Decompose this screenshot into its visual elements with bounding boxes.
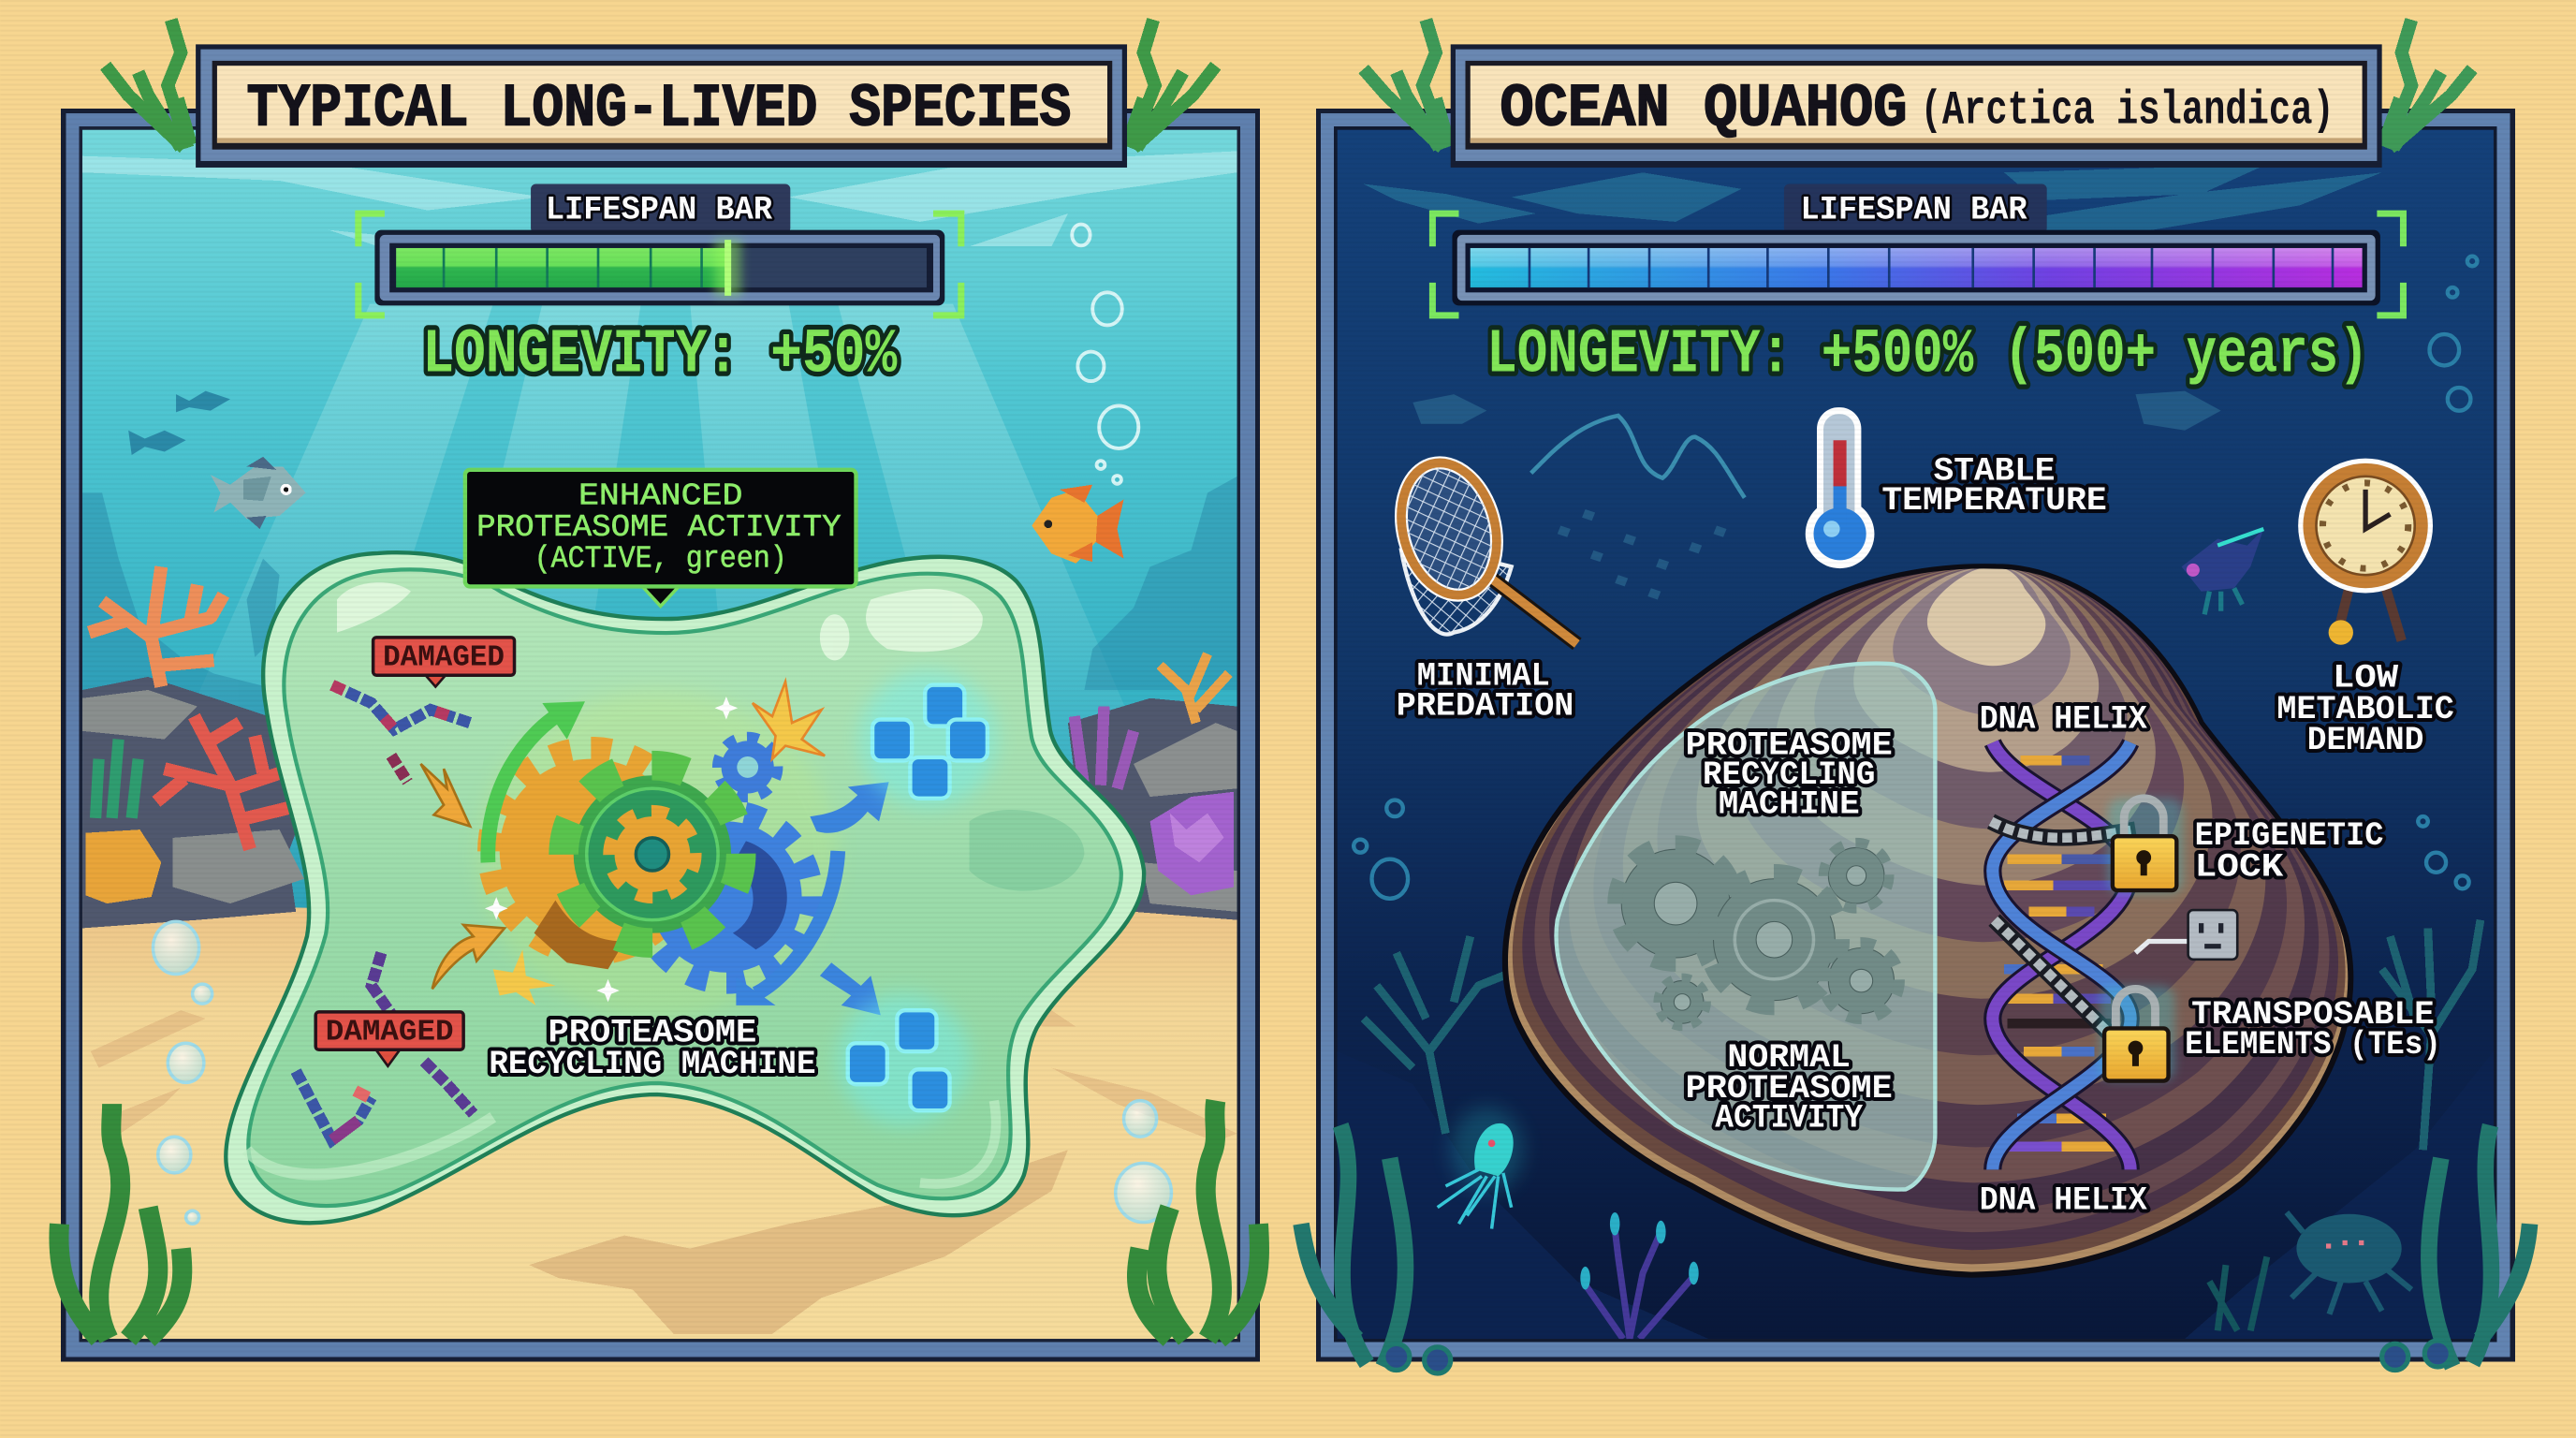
scene: deep sea bbox=[1338, 130, 2494, 1339]
arrow: blue curve bbox=[755, 851, 838, 994]
label: transposable elements bbox=[2185, 996, 2441, 1064]
damaged label top bbox=[373, 638, 515, 686]
fish silhouettes bbox=[128, 391, 230, 455]
seaweed: top right bbox=[1127, 20, 1216, 148]
label: normal proteasome activity: ACTIVITY bbox=[1715, 1100, 1863, 1137]
label: proteasome recycling machine bbox=[1686, 726, 1893, 824]
arrow: blue to output bottom bbox=[820, 962, 881, 1015]
panel frame bbox=[1316, 109, 2515, 1362]
arrow: orange in upper bbox=[421, 764, 470, 827]
label: minimal predation: PREDATION bbox=[1397, 687, 1573, 725]
purple plant bbox=[1586, 1229, 1692, 1339]
coral: orange right bbox=[1160, 653, 1229, 723]
label: DNA helix top: DNA HELIX bbox=[1980, 700, 2148, 738]
arrow: blue to output top bbox=[810, 782, 889, 833]
panel: ocean quahog bbox=[1301, 20, 2530, 1373]
label: proteasome recycling machine: MACHINE bbox=[1719, 786, 1860, 824]
callout: enhanced proteasome activity bbox=[465, 470, 856, 606]
label: epigenetic lock: LOCK bbox=[2195, 848, 2284, 886]
quahog shell bbox=[1505, 566, 2350, 1275]
label: low metabolic demand: LOW bbox=[2333, 659, 2399, 697]
icon: transposable element bbox=[2135, 910, 2237, 960]
title text: OCEAN QUAHOG bbox=[1500, 75, 1908, 143]
label: low metabolic demand: DEMAND bbox=[2307, 722, 2423, 759]
bubbles bbox=[1354, 257, 2477, 899]
jellyfish bbox=[1438, 1108, 1523, 1229]
light rays bbox=[208, 303, 1124, 766]
label: epigenetic lock: EPIGENETIC bbox=[2195, 817, 2383, 855]
label: DNA helix bottom: DNA HELIX bbox=[1980, 1181, 2148, 1219]
coral: purple fronds bbox=[1075, 707, 1134, 788]
damaged label bottom bbox=[315, 1012, 463, 1066]
damaged label bottom: DAMAGED bbox=[326, 1017, 454, 1049]
label: proteasome recycling machine: PROTEASOME bbox=[548, 1014, 756, 1051]
sand floor bbox=[82, 906, 1237, 1339]
lifespan label: LIFESPAN BAR bbox=[546, 191, 773, 228]
label: minimal predation: MINIMAL bbox=[1417, 658, 1550, 696]
coral: red left bbox=[156, 716, 300, 849]
label: epigenetic lock bbox=[2195, 817, 2383, 886]
label: normal proteasome activity: NORMAL bbox=[1727, 1039, 1851, 1077]
label: transposable elements: TRANSPOSABLE bbox=[2191, 996, 2435, 1034]
small blue gear bbox=[718, 738, 777, 797]
scientific name: (Arctica islandica) bbox=[1921, 85, 2334, 139]
green gear bbox=[564, 766, 741, 943]
coral roots: bottom left bbox=[1383, 1343, 1451, 1373]
sea grass left bbox=[95, 740, 139, 818]
label: transposable elements: ELEMENTS (TEs) bbox=[2185, 1026, 2441, 1064]
icon: hand net bbox=[1387, 452, 1577, 644]
seaweed: top right bbox=[2383, 20, 2472, 148]
label: proteasome recycling machine: RECYCLING bbox=[1703, 756, 1875, 794]
label: proteasome recycling machine: RECYCLING MACHINE bbox=[489, 1046, 816, 1083]
dark coral left bbox=[1364, 936, 1519, 1134]
callout: enhanced proteasome activity: ENHANCED bbox=[578, 479, 742, 515]
scene: sunlit reef bbox=[82, 130, 1237, 1339]
seaweed: bottom left bbox=[1301, 1125, 1406, 1367]
label: normal proteasome activity bbox=[1686, 1039, 1893, 1137]
bar brackets bbox=[1432, 213, 2403, 315]
seaweed: bottom right bbox=[1137, 1101, 1259, 1339]
lifespan bar: 50% bbox=[359, 184, 961, 315]
dark coral right bbox=[2382, 920, 2481, 1150]
callout: enhanced proteasome activity: PROTEASOME ACTIVITY bbox=[476, 510, 842, 546]
coral: orange left bbox=[89, 566, 224, 686]
rocks bbox=[82, 677, 1237, 928]
sand patches bbox=[91, 1010, 1237, 1334]
arrow head: green bbox=[542, 701, 585, 740]
lifespan label: LIFESPAN BAR bbox=[1800, 191, 2028, 228]
panel frame bbox=[61, 109, 1260, 1362]
panel title plate bbox=[1451, 44, 2382, 168]
lifespan bar: full bbox=[1432, 184, 2403, 315]
coral: purple blob bbox=[1150, 792, 1234, 895]
callout: enhanced proteasome activity: (ACTIVE, green) bbox=[534, 541, 787, 577]
arrow: green recycle bbox=[488, 710, 567, 862]
longevity readout: LONGEVITY: +50% bbox=[422, 320, 898, 391]
damaged protein chains bbox=[296, 685, 474, 1140]
icon: epigenetic lock bbox=[2108, 799, 2183, 894]
cell membrane bbox=[227, 554, 1142, 1221]
icon: clock bbox=[2298, 459, 2433, 645]
arrow: orange in lower bbox=[432, 925, 505, 989]
small deep fish bbox=[2182, 529, 2263, 614]
chains bbox=[1991, 821, 2135, 838]
coral: yellow blob bbox=[86, 829, 161, 903]
coral roots: bottom right bbox=[2382, 1341, 2451, 1370]
label: stable temperature: TEMPERATURE bbox=[1881, 482, 2107, 520]
grey gears bbox=[1615, 843, 1899, 1027]
label: proteasome recycling machine bbox=[489, 1014, 816, 1083]
arrow head: blue curve bbox=[736, 977, 776, 1005]
orange gear bbox=[490, 749, 694, 969]
bubbles: upper right bbox=[1072, 225, 1138, 484]
icon: TE lock bbox=[2100, 986, 2175, 1081]
fish: grey bbox=[211, 457, 306, 529]
plankton shoals bbox=[1412, 391, 2221, 599]
seaweed: bottom left bbox=[59, 1104, 183, 1339]
label: normal proteasome activity: PROTEASOME bbox=[1686, 1070, 1893, 1108]
translucent proteasome window bbox=[1557, 664, 1935, 1190]
distant reef silhouettes bbox=[82, 477, 1237, 715]
damaged label top: DAMAGED bbox=[383, 642, 505, 675]
label: stable temperature: STABLE bbox=[1934, 452, 2055, 490]
label: low metabolic demand bbox=[2276, 659, 2454, 759]
label: stable temperature bbox=[1881, 452, 2107, 520]
seaweed: top left bbox=[1364, 20, 1449, 148]
output peptides bottom bbox=[838, 994, 970, 1125]
panel: typical long-lived species bbox=[59, 20, 1260, 1362]
output peptides top bbox=[859, 670, 997, 808]
rungs bbox=[2004, 760, 2122, 1147]
bubbles: lower bbox=[153, 921, 1171, 1224]
longevity readout: LONGEVITY: +500% (500+ years) bbox=[1486, 320, 2369, 391]
bar brackets bbox=[359, 213, 961, 315]
seaweed: bottom right bbox=[2429, 1125, 2530, 1367]
blue gear bbox=[641, 812, 812, 982]
dark crab bbox=[2287, 1212, 2411, 1314]
seaweed: top left bbox=[106, 20, 191, 148]
label: minimal predation bbox=[1397, 658, 1573, 725]
label: low metabolic demand: METABOLIC bbox=[2276, 691, 2454, 728]
gears: proteasome machine bbox=[490, 738, 812, 982]
purple strand bbox=[1993, 742, 2130, 1169]
icon: thermometer bbox=[1806, 407, 1874, 568]
sea grass floor right bbox=[2209, 1256, 2267, 1330]
sparks bbox=[485, 682, 825, 1005]
blue strand bbox=[1993, 742, 2130, 1169]
panel title plate bbox=[196, 44, 1127, 168]
bottom ridges bbox=[1338, 1051, 2494, 1339]
label: proteasome recycling machine: PROTEASOME bbox=[1686, 726, 1893, 764]
DNA helix bbox=[1991, 742, 2135, 1169]
ribbon creature bbox=[1531, 416, 1745, 498]
plant tips bbox=[1580, 1212, 1699, 1289]
title text: TYPICAL LONG-LIVED SPECIES bbox=[247, 75, 1071, 143]
fish: orange bbox=[1032, 485, 1124, 564]
